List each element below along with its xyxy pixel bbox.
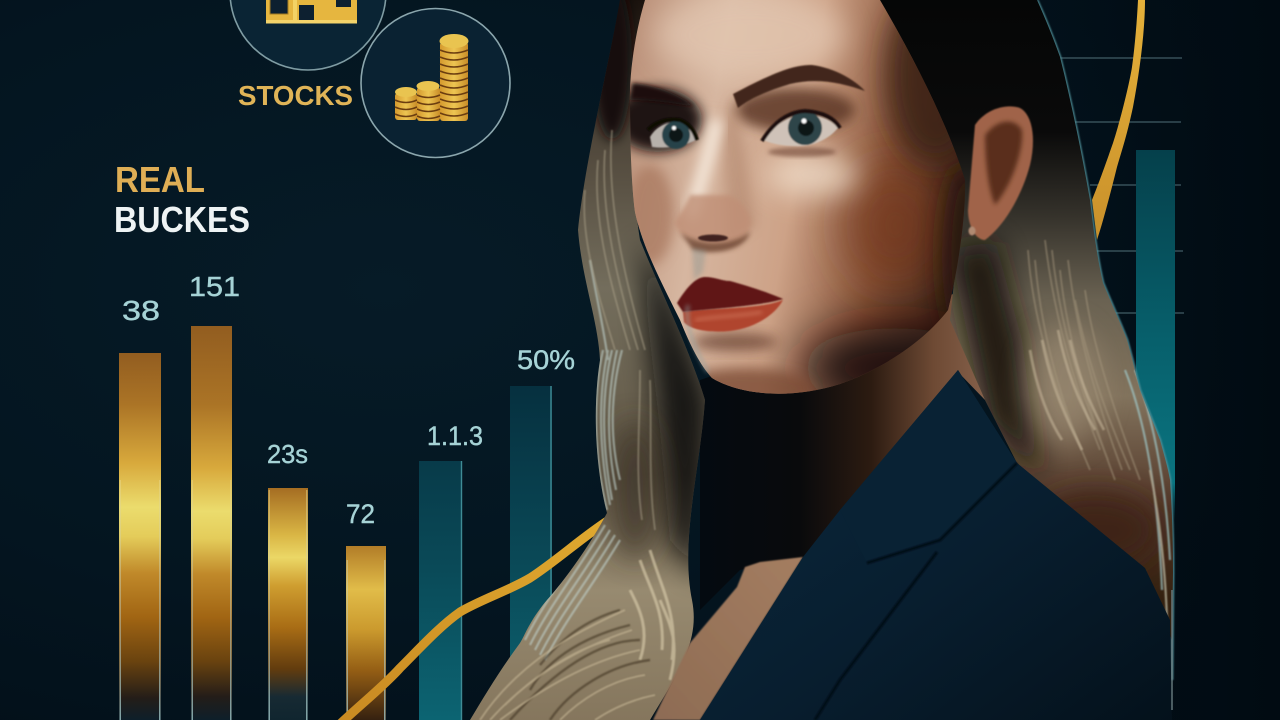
portrait of woman xyxy=(470,0,1180,720)
bar 5 xyxy=(419,461,462,720)
nose bridge highlight xyxy=(692,125,716,212)
cheek highlight xyxy=(766,153,858,197)
icon circle: stocks xyxy=(361,8,510,158)
heading: buckes: BUCKES xyxy=(114,199,250,240)
eye socket left xyxy=(614,88,702,152)
jaw shadow xyxy=(800,328,990,408)
value: bar 4: 72 xyxy=(346,499,375,529)
bar 3 xyxy=(268,488,308,720)
heading: real: REAL xyxy=(115,159,205,200)
nose tip xyxy=(675,195,751,244)
gold trend line xyxy=(340,520,609,720)
chest skin xyxy=(653,557,803,720)
cheek shadow xyxy=(845,163,945,287)
under-eye shadow xyxy=(768,147,836,157)
right edge shadow xyxy=(924,162,965,316)
icon circle: real estate xyxy=(230,0,386,70)
bar 2 xyxy=(191,326,232,720)
value: bar 3: 23s xyxy=(267,439,308,469)
left cheek tone xyxy=(626,165,674,265)
bar 1 xyxy=(119,353,161,720)
jacket collar xyxy=(840,370,1017,563)
bar 6 xyxy=(510,386,552,660)
icon: coin stacks xyxy=(395,34,468,121)
hair, left side xyxy=(470,0,710,720)
hair rim light, right xyxy=(1037,0,1173,680)
value: bar 2: 151 xyxy=(189,271,240,302)
lower lip xyxy=(683,300,783,332)
ear xyxy=(968,106,1033,240)
philtrum streak xyxy=(692,248,706,280)
bar chart, left xyxy=(119,326,552,720)
eye: right xyxy=(762,111,840,146)
bar 4 xyxy=(346,546,386,720)
eye socket right xyxy=(735,88,855,132)
nostril xyxy=(698,234,728,242)
eye: left xyxy=(648,119,697,149)
value: bar 1: 38 xyxy=(122,295,160,326)
hair, right side xyxy=(880,0,1180,660)
jacket xyxy=(700,370,1172,720)
temple shadow xyxy=(867,6,954,173)
right background shade xyxy=(1000,0,1280,720)
upper lip xyxy=(677,277,783,312)
chin shade xyxy=(703,361,810,394)
value: bar 6: 50% xyxy=(517,345,575,375)
teal bar, right xyxy=(1136,150,1175,520)
collar seam xyxy=(815,463,1017,720)
eyebrow: right xyxy=(733,65,865,108)
hair rim, lower right xyxy=(1171,590,1173,710)
chart grid lines, right xyxy=(1050,58,1184,313)
icon: building xyxy=(266,0,357,24)
lip shadow xyxy=(693,333,777,351)
nose side shadow xyxy=(720,106,757,230)
forehead light xyxy=(655,0,845,80)
bar value labels xyxy=(122,271,575,529)
eyebrow: left xyxy=(630,83,695,107)
value: bar 5: 1.1.3 xyxy=(427,421,483,451)
neck xyxy=(700,290,985,610)
face xyxy=(630,0,965,394)
gold trend curve, right xyxy=(1092,0,1145,240)
lip highlight xyxy=(695,312,762,320)
nose underside xyxy=(680,232,750,252)
label: stocks: STOCKS xyxy=(238,80,353,111)
face edge highlight xyxy=(687,305,708,372)
